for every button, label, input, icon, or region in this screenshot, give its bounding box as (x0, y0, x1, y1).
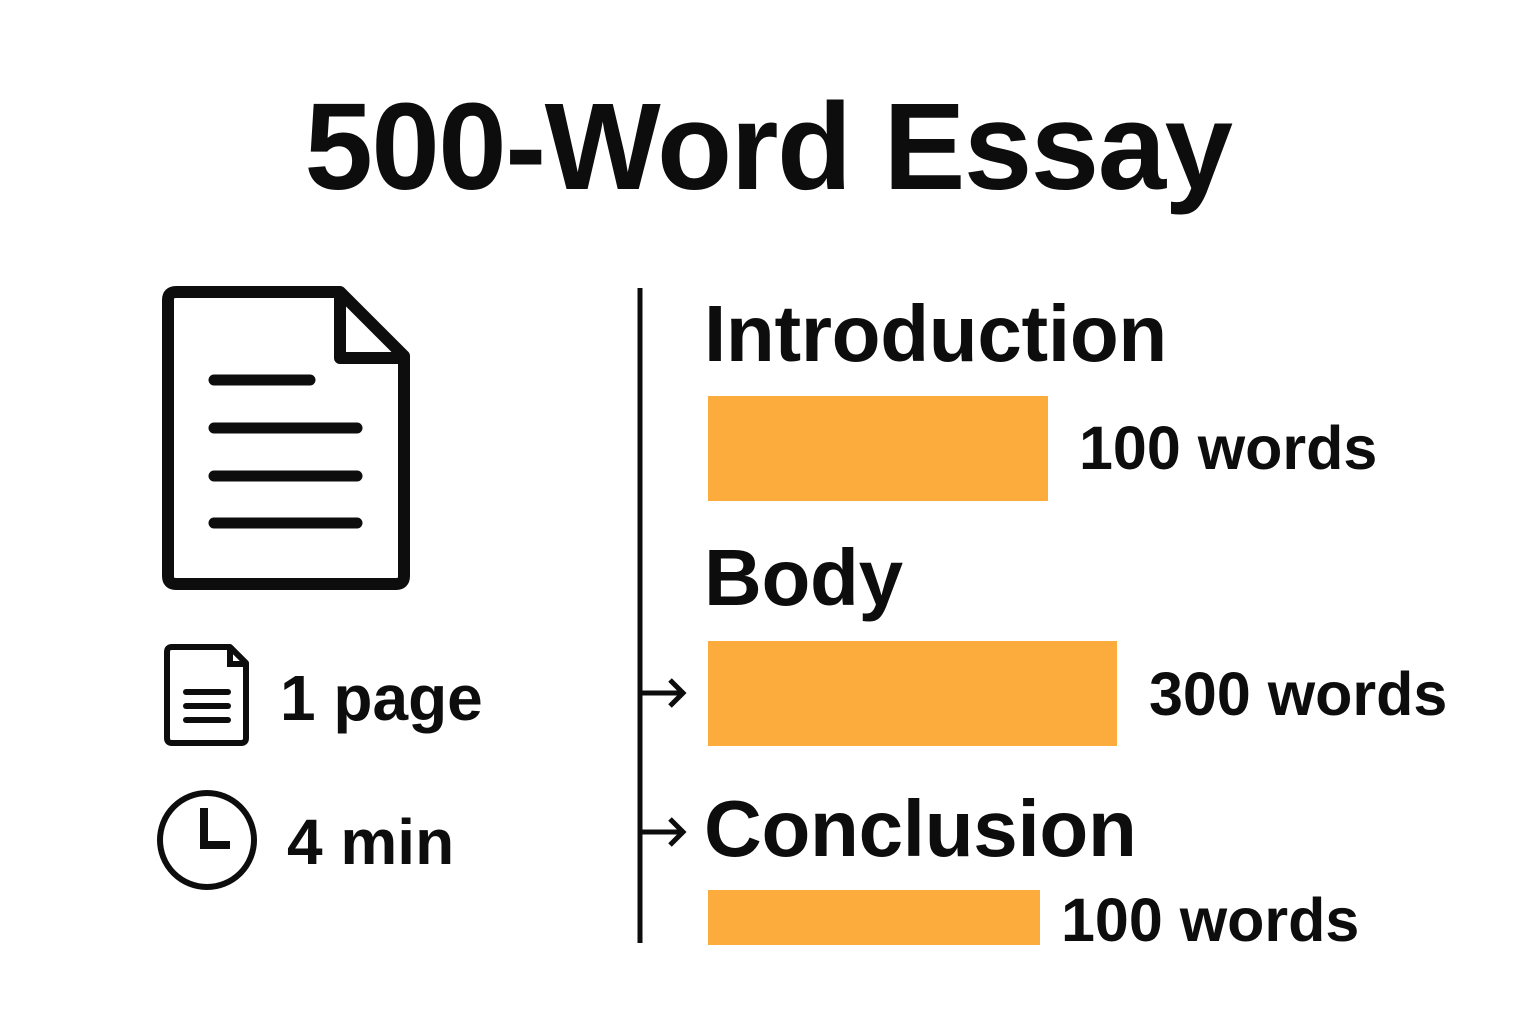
arrow: body (642, 680, 683, 706)
text: 1 page: 1 page (280, 662, 483, 734)
bar: conclusion (708, 890, 1040, 945)
heading: Body: Body (704, 533, 903, 622)
icon: clock (157, 790, 257, 890)
title: 500-Word Essay (304, 79, 1232, 216)
divider line with arrows (638, 288, 686, 943)
label: 300 words: 300 words (1149, 660, 1447, 728)
bar: body (708, 641, 1117, 746)
heading: Conclusion: Conclusion (704, 784, 1137, 873)
arrow: conclusion (642, 819, 683, 845)
heading: Introduction: Introduction (704, 289, 1167, 378)
text: 4 min: 4 min (287, 806, 454, 878)
icon: large document (162, 286, 410, 590)
label: 100 words conclusion: 100 words (1061, 886, 1359, 954)
bar: introduction (708, 396, 1048, 501)
label: 100 words: 100 words (1079, 414, 1377, 482)
icon: small document (164, 644, 249, 746)
